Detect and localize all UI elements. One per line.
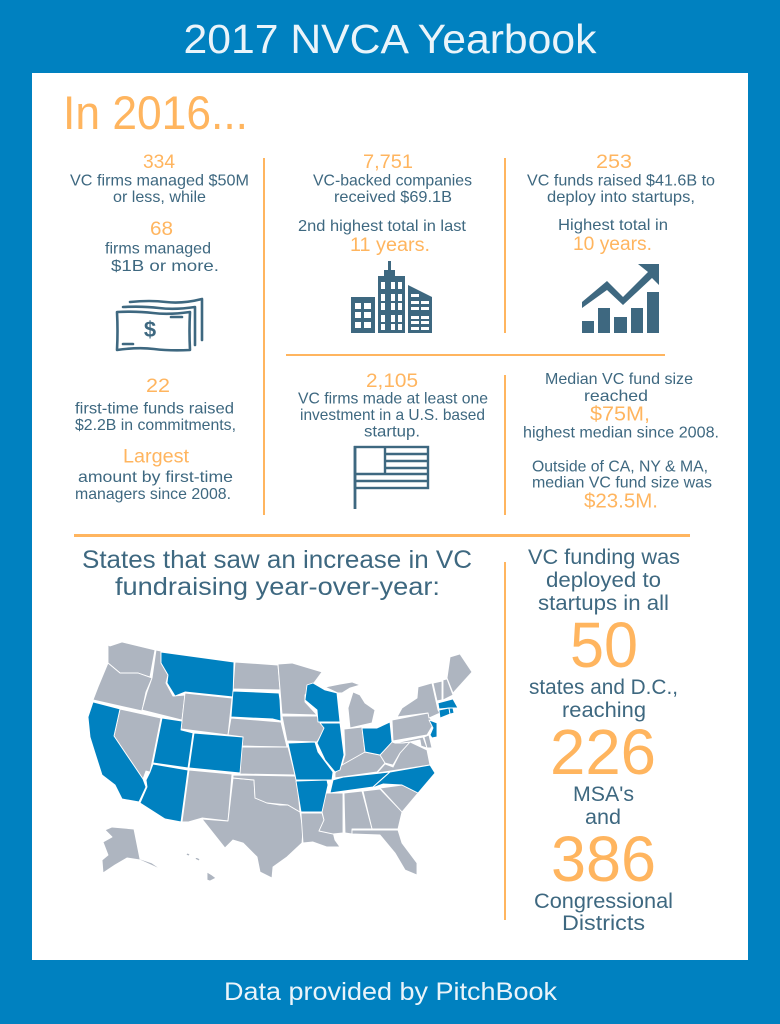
text block: median fund size: reached	[584, 388, 648, 405]
text block: VC-backed companies	[298, 152, 472, 256]
text block: median fund size: $23.5M.	[584, 490, 658, 512]
footer: data source: Data provided by PitchBook	[224, 978, 558, 1006]
text block: VC funds raised: Highest total in	[558, 217, 668, 234]
text block: funding deployed: Congressional	[534, 890, 673, 913]
text block: VC firms investment	[298, 371, 488, 440]
heading: states increase: States that saw an increase in VC	[82, 546, 472, 574]
text block: VC firms size: firms managed	[105, 240, 211, 258]
text block: funding deployed: MSA's	[573, 783, 634, 806]
text block: VC funds raised: 253	[596, 152, 632, 173]
text block: funding deployed: and	[585, 806, 621, 829]
icon: US flag	[355, 446, 428, 509]
text block: first-time funds: first-time funds raised	[75, 400, 234, 418]
text block: first-time funds: $2.2B in commitments,	[75, 417, 236, 434]
text block: VC-backed companies: 11 years.	[350, 235, 430, 256]
text block: funding deployed: deployed to	[546, 569, 661, 592]
text block: funding deployed: states and D.C.,	[529, 676, 678, 699]
text block: VC funds raised: 10 years.	[573, 234, 652, 255]
stat: 226: 226	[550, 716, 656, 788]
icon: growth chart	[582, 264, 659, 333]
text block: VC firms size: or less, while	[113, 189, 206, 206]
panel: white content area	[32, 73, 748, 960]
heading: states increase: fundraising year-over-year:	[115, 573, 440, 601]
text block: funding deployed	[528, 546, 680, 935]
title: 2017 NVCA Yearbook	[184, 16, 597, 62]
text block: first-time funds: Largest	[123, 446, 190, 468]
text block: funding deployed: reaching	[562, 699, 646, 722]
text block: median fund size: Outside of CA, NY & MA,	[532, 458, 708, 476]
text block: VC firms investment: investment in a U.S. based	[300, 407, 485, 424]
stat: 50: 50	[570, 609, 638, 681]
text block: VC firms investment: startup.	[364, 424, 420, 440]
text block: VC-backed companies: 7,751	[363, 152, 413, 173]
text block: first-time funds	[75, 376, 236, 503]
text block: first-time funds: 22	[146, 376, 170, 397]
text block: VC firms investment: VC firms made at least one	[298, 390, 488, 408]
text block: first-time funds: amount by first-time	[78, 469, 233, 486]
text block: median fund size: highest median since 2008.	[523, 424, 719, 442]
states without increase	[93, 642, 472, 881]
heading: In 2016: In 2016...	[63, 86, 248, 139]
text block: VC firms size	[70, 152, 249, 275]
text block: funding deployed: startups in all	[538, 592, 669, 615]
text block: VC-backed companies: received $69.1B	[334, 189, 452, 206]
text block: funding deployed: Districts	[562, 912, 645, 935]
map: US states	[88, 642, 472, 881]
text block: VC funds raised: deploy into startups,	[547, 189, 695, 206]
stat: 386: 386	[551, 823, 656, 895]
text block: first-time funds: managers since 2008.	[75, 486, 231, 503]
text block: median fund size: $75M,	[590, 404, 650, 426]
text block: VC-backed companies: VC-backed companies	[313, 172, 472, 190]
text block: median fund size: median VC fund size was	[532, 474, 712, 492]
text block: VC funds raised: VC funds raised $41.6B to	[527, 172, 715, 190]
text block: VC firms size: 334	[143, 152, 175, 173]
icon: money bills: $	[144, 317, 156, 342]
text block: VC-backed companies: 2nd highest total in last	[298, 218, 467, 235]
icon: money bills	[117, 299, 202, 350]
text block: VC firms size: $1B or more.	[111, 258, 219, 275]
text block: VC firms size: VC firms managed $50M	[70, 172, 249, 190]
icon: city buildings	[351, 261, 432, 333]
text block: median fund size	[523, 371, 719, 512]
text block: median fund size: Median VC fund size	[545, 371, 693, 388]
heading: states increase	[82, 546, 472, 601]
text block: VC firms size: 68	[150, 219, 173, 240]
states with increase	[88, 652, 458, 822]
text block: VC funds raised	[527, 152, 715, 255]
text block: funding deployed: VC funding was	[528, 546, 680, 569]
text block: VC firms investment: 2,105	[366, 371, 418, 392]
